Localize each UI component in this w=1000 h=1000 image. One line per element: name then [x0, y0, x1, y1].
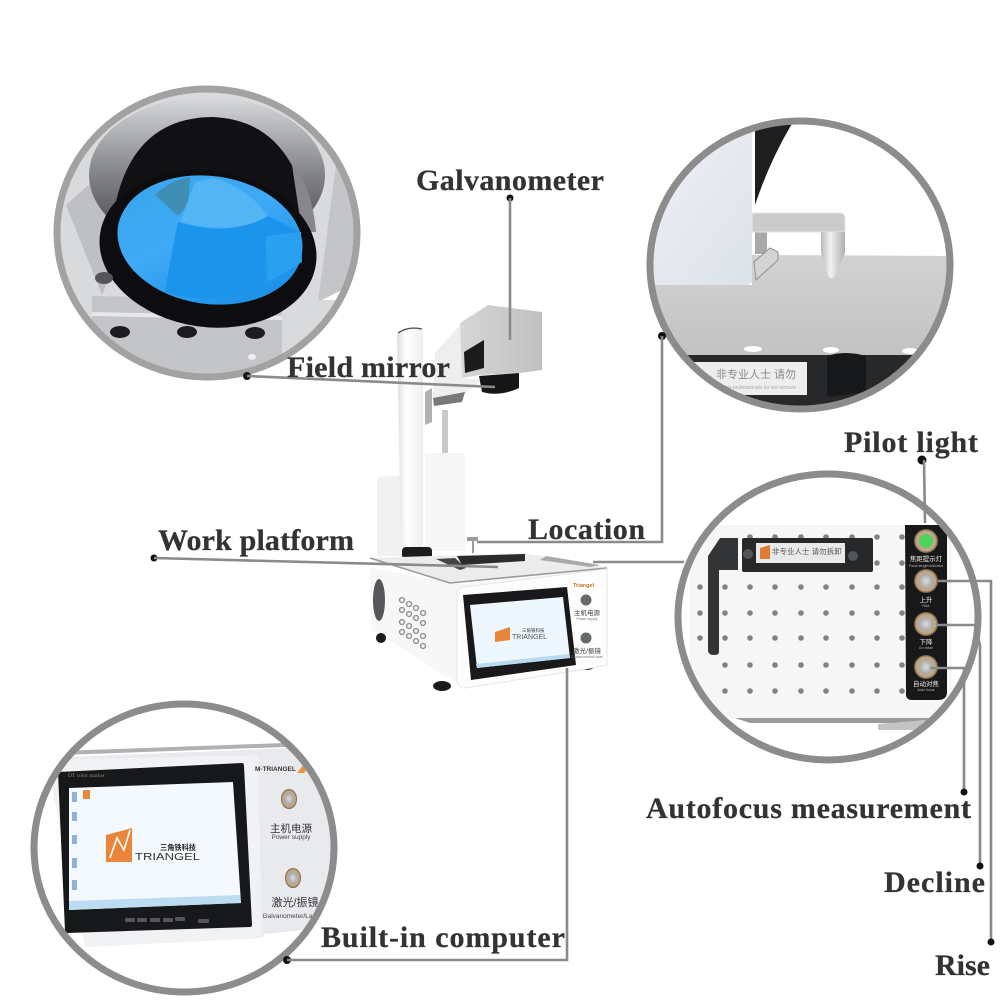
bezel buttons	[125, 917, 209, 923]
decline button: Go down	[919, 646, 933, 650]
black strip	[688, 355, 912, 406]
callout line: autofocus	[930, 668, 968, 796]
rear box	[425, 453, 465, 551]
touch screen	[463, 587, 576, 680]
label: Decline: Decline	[884, 866, 985, 899]
callout line: galvanometer	[506, 194, 514, 340]
lens barrel	[116, 117, 300, 213]
touch screen: 三角铁科技	[522, 627, 545, 634]
pilot light	[909, 529, 944, 568]
panel: field mirror close-up	[50, 85, 365, 385]
L bracket	[708, 538, 738, 655]
touch screen: TRIANGEL	[512, 634, 547, 641]
feet	[376, 633, 594, 691]
galvanometer knob: Galvanometer/Laser	[263, 913, 322, 920]
label: Galvanometer: Galvanometer	[416, 164, 604, 197]
power knob	[574, 594, 600, 621]
front brand: Triangel	[573, 583, 595, 589]
machine body	[370, 568, 607, 688]
label: Location: Location	[528, 513, 645, 546]
power knob: Power supply	[271, 834, 311, 841]
upper housing	[89, 104, 325, 216]
label: Field mirror: Field mirror	[287, 351, 450, 384]
panel: location pin close-up	[640, 110, 960, 420]
pilot light: Focal length indicator	[909, 564, 944, 568]
button strip	[905, 525, 947, 700]
callout line: built-in computer	[283, 668, 567, 964]
top plate	[370, 553, 607, 583]
callout line: work platform	[150, 554, 498, 567]
galvanometer knob: 激光/振镜	[271, 895, 319, 909]
galvanometer head	[460, 305, 542, 378]
knob	[827, 353, 866, 397]
base plate	[92, 296, 282, 374]
field lens	[479, 373, 519, 394]
fixture on table	[457, 554, 525, 565]
power knob	[270, 789, 312, 841]
callout line: location	[477, 332, 666, 542]
autofocus button: 自动对焦	[913, 679, 940, 688]
arm	[752, 213, 845, 232]
clamp and post	[755, 232, 767, 254]
autofocus button	[913, 655, 940, 692]
label: Work platform: Work platform	[158, 524, 354, 557]
upright panel	[654, 132, 752, 285]
decline button: 下降	[920, 637, 933, 646]
decline button	[914, 612, 938, 650]
side fan	[373, 579, 385, 621]
LCD	[69, 782, 241, 910]
probe	[821, 232, 845, 278]
callout line: decline	[936, 625, 984, 870]
callout line: field mirror	[243, 372, 495, 387]
fixture label	[756, 543, 845, 563]
logo: 三角铁科技	[160, 843, 197, 852]
front panel	[70, 748, 330, 938]
power knob: 主机电源	[270, 822, 312, 835]
laser knob: Galvanometer/Laser	[571, 655, 604, 659]
rise button: 上升	[920, 595, 933, 604]
fixture label: 非专业人士 请勿拆卸	[772, 546, 842, 556]
laser arm	[433, 325, 482, 398]
panel: control buttons close-up	[670, 465, 990, 765]
left side box	[377, 475, 406, 556]
pilot light: 焦距提示灯	[910, 554, 943, 563]
lens ring	[100, 201, 316, 328]
plate holes	[697, 534, 905, 694]
galvanometer knob	[263, 868, 322, 920]
column collar	[402, 547, 432, 559]
callout line: rise	[938, 581, 994, 946]
housing sides	[66, 184, 108, 294]
panel: built-in computer close-up	[30, 700, 338, 996]
ring	[650, 121, 950, 409]
guide rod	[442, 410, 448, 453]
ring	[34, 704, 334, 992]
brand: M-TRIANGEL	[255, 766, 296, 773]
warning label: Non-professionals do not remove	[722, 385, 796, 391]
label: Built-in computer: Built-in computer	[321, 921, 565, 954]
front panel	[457, 569, 607, 688]
warning label: 非专业人士 请勿	[716, 367, 796, 381]
autofocus button: Auto focus	[918, 688, 935, 692]
spring cover	[755, 122, 793, 205]
callout line: pilot light	[918, 456, 926, 523]
perforated plate	[690, 525, 952, 718]
callout line: control panel link	[593, 561, 684, 563]
rise button: Rise	[922, 604, 930, 608]
column	[397, 329, 423, 548]
top edge	[74, 743, 286, 754]
panel: built-in computer close-up: DT color marker	[68, 773, 105, 779]
fixture bar	[742, 538, 873, 572]
blue glass	[117, 175, 302, 305]
ring	[678, 474, 978, 760]
power knob: Power supply	[576, 617, 598, 621]
logo	[106, 828, 201, 863]
laser knob	[571, 632, 604, 659]
side vents	[400, 598, 425, 648]
logo: TRIANGEL	[135, 852, 201, 863]
warning label	[690, 362, 807, 395]
label: Pilot light: Pilot light	[844, 426, 978, 459]
screws	[110, 326, 130, 338]
main machine	[370, 305, 607, 691]
label: Rise: Rise	[935, 949, 990, 982]
label: Autofocus measurement: Autofocus measurement	[646, 792, 971, 825]
desktop icons	[72, 790, 90, 890]
location pin	[467, 537, 478, 553]
mounting bracket	[425, 388, 432, 425]
laser knob: 激光/振镜	[573, 646, 601, 655]
power knob: 主机电源	[574, 608, 600, 617]
ring	[57, 89, 357, 377]
rise button	[914, 569, 938, 608]
work table	[655, 255, 946, 355]
screen bezel	[58, 763, 252, 933]
